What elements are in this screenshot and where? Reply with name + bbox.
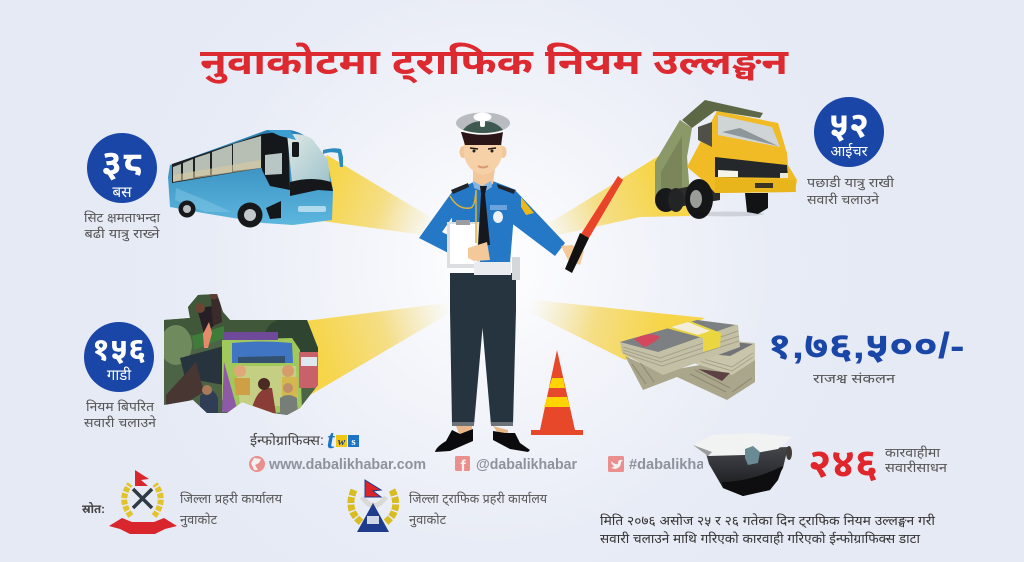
stat badge: 38 buses: बस [112, 184, 132, 201]
stat badge: 156 vehicles: गाडी [107, 367, 132, 384]
caption: truck: पछाडी यात्रु राखी [807, 175, 895, 191]
right hand [561, 245, 584, 265]
text: district police office: जिल्ला प्रहरी कार्यालय [180, 491, 283, 506]
lanyard [450, 190, 476, 243]
social links [249, 456, 703, 472]
text: district traffic police office [409, 491, 548, 528]
panel: actions taken [600, 433, 948, 546]
shoes [435, 426, 530, 452]
torso [452, 180, 516, 263]
text: district police office [180, 491, 283, 528]
icon: twitter [608, 456, 624, 472]
caption: actions [885, 445, 948, 475]
trousers [450, 273, 516, 425]
panel: tipper truck [655, 97, 895, 219]
caption: actions: कारवाहीमा [885, 445, 941, 460]
text: district traffic police office: नुवाकोट [409, 512, 447, 528]
panel: bus violation [84, 130, 343, 242]
clipboard [447, 222, 480, 268]
title: नुवाकोटमा ट्राफिक नियम उल्लङ्घन [200, 42, 790, 84]
panel: wrong-way vehicles [84, 294, 318, 428]
text: district police office: नुवाकोट [180, 512, 218, 528]
icon: globe [249, 456, 265, 472]
hashtag: #dabalikhabar [629, 457, 727, 473]
stat badge: 38 buses [87, 133, 157, 203]
caption: revenue: राजश्व संकलन [813, 371, 896, 386]
badge [493, 211, 503, 223]
epaulettes [451, 183, 515, 194]
stat badge: 38 buses: ३८ [101, 143, 143, 184]
caption: truck: सवारी चलाउने [807, 192, 880, 207]
stat badge: 156 vehicles [84, 322, 154, 392]
icon: money stacks [620, 320, 755, 400]
caption: truck [807, 175, 895, 207]
arm left [419, 192, 472, 263]
description [600, 513, 936, 546]
shoulder patch [521, 197, 534, 215]
text: district traffic police office: जिल्ला ट्राफिक प्रहरी कार्यालय [409, 491, 548, 506]
caption: wrong-way [84, 399, 157, 430]
source label: स्रोत: [82, 501, 105, 516]
belt [474, 262, 511, 275]
stat badge: 52 eicher [814, 97, 884, 167]
stat badge: 156 vehicles: १५६ [92, 332, 146, 367]
revenue amount: १,७६,५००/- [768, 325, 964, 366]
stat: 246: २४६ [808, 442, 878, 486]
light beams [300, 152, 705, 398]
caption: bus: सिट क्षमताभन्दा [84, 210, 161, 225]
icon: facebook: f [460, 458, 466, 475]
caption: wrong-way: नियम बिपरित [86, 399, 155, 414]
credit: infographics: s [351, 436, 356, 448]
panel: revenue [620, 320, 964, 400]
stat badge: 52 eicher: आईचर [830, 143, 869, 160]
photo: overloaded bus [164, 294, 318, 415]
credit: infographics: ईन्फोग्राफिक्स: [250, 432, 324, 448]
panel: officer illustration [419, 112, 623, 452]
icon: blue bus [168, 130, 343, 228]
credit: infographics: t [327, 425, 335, 454]
caption: wrong-way: सवारी चलाउने [84, 415, 157, 430]
logo: district traffic police [351, 480, 396, 532]
logo: district police [109, 470, 177, 534]
icon: truck [655, 100, 797, 219]
left hand [468, 242, 490, 261]
icon: police cap [693, 433, 792, 496]
social links: www.dabalikhabar.com [268, 457, 426, 473]
hat [456, 112, 510, 145]
neck and face [473, 168, 495, 190]
caption: actions: सवारीसाधन [885, 460, 948, 475]
caption: bus [84, 210, 161, 242]
stat badge: 52 eicher: ५२ [829, 106, 869, 145]
social links: @dabalikhabar [476, 457, 577, 473]
collar and tie [473, 181, 492, 192]
credit: infographics [250, 425, 359, 454]
credit: infographics: w [338, 436, 346, 448]
sources [82, 470, 548, 534]
caption: bus: बढी यात्रु राख्ने [84, 226, 161, 242]
baton [565, 176, 623, 273]
icon: traffic cone [531, 350, 583, 435]
arm right [510, 189, 565, 256]
icon: facebook [455, 456, 470, 475]
description: मिति २०७६ असोज २५ र २६ गतेका दिन ट्राफिक नियम उल्लङ्घन गरी [600, 513, 936, 528]
description: सवारी चलाउने माथि गरिएको कारवाही गरिएको ईन्फोग्राफिक्स डाटा [600, 531, 921, 546]
